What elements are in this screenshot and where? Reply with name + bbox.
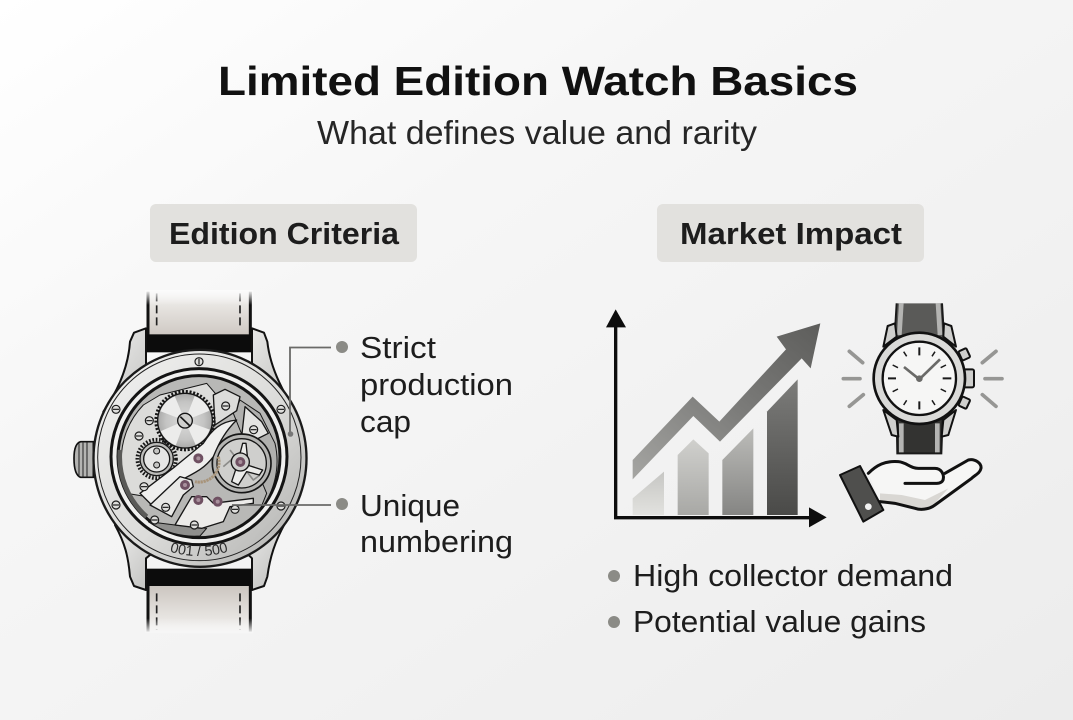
bottom strap [145, 569, 253, 633]
case back [92, 348, 308, 568]
small gear [137, 440, 176, 478]
trend arrow [633, 323, 820, 479]
bronze escape wheel [195, 457, 219, 482]
callout: unique numbering [232, 488, 513, 559]
diagonal bridge [140, 420, 237, 505]
callout: strict production cap: Strict [360, 330, 436, 365]
heading: Market Impact [657, 204, 924, 262]
illustration: watch caseback [73, 292, 308, 632]
case screws [112, 358, 285, 510]
axes [606, 309, 827, 527]
heading: Edition Criteria [150, 204, 417, 262]
callout: strict production cap: cap [360, 404, 411, 439]
large gear [156, 392, 214, 449]
bullet: high collector demand: High collector demand [633, 558, 953, 593]
edition number [137, 534, 261, 556]
lower bridges [150, 477, 193, 517]
dial [874, 333, 965, 424]
case back: 001 / 500 [171, 542, 227, 556]
shine marks [843, 351, 1002, 406]
bars [633, 379, 798, 515]
heading: Market Impact: Market Impact [680, 216, 902, 251]
title: Limited Edition Watch Basics [218, 58, 858, 104]
top strap [145, 290, 253, 352]
chart: rising value [606, 309, 827, 527]
movement screws [135, 402, 258, 529]
lugs and pushers [883, 323, 974, 437]
hand [840, 460, 981, 522]
callout: unique numbering: numbering [360, 524, 513, 559]
heading: Edition Criteria: Edition Criteria [169, 216, 400, 251]
illustration: watch in hand [840, 303, 1002, 522]
subtitle: What defines value and rarity [317, 114, 758, 151]
callout: strict production cap: production [360, 367, 513, 402]
strap [895, 303, 944, 453]
callout: strict production cap [288, 330, 513, 439]
balance wheel [212, 434, 271, 493]
case lugs [103, 328, 295, 590]
jewels [180, 453, 223, 507]
crown [74, 442, 93, 477]
callout: unique numbering: Unique [360, 488, 460, 523]
bullet: potential value gains: Potential value gains [633, 604, 926, 639]
movement [120, 383, 277, 536]
